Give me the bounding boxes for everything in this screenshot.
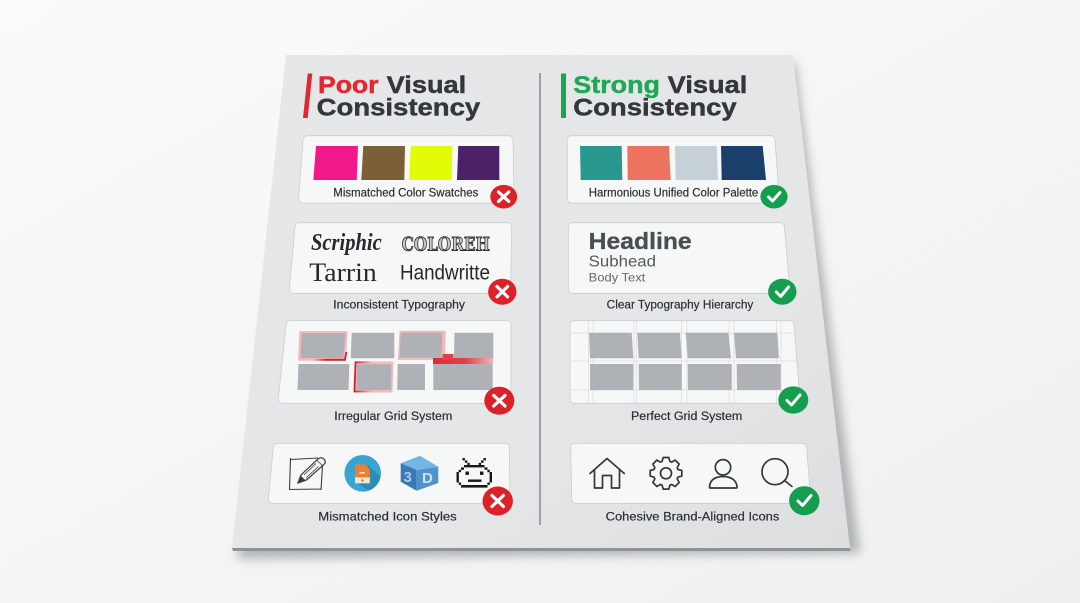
heading: poor visual consistency bbox=[303, 72, 481, 122]
icon: green check badge bbox=[768, 279, 796, 305]
heading: strong visual consistency bbox=[561, 72, 747, 122]
icon: sketched pencil bbox=[289, 458, 325, 490]
icon: pixel robot bbox=[456, 458, 492, 488]
card: clear typography hierarchy: Clear Typography Hierarchy bbox=[607, 299, 754, 311]
card: inconsistent typography: Tarrin bbox=[309, 258, 377, 287]
card: clear typography hierarchy bbox=[568, 223, 796, 311]
icon: house bbox=[590, 458, 624, 488]
card: clear typography hierarchy: Subhead bbox=[589, 254, 656, 271]
icon: red cross badge bbox=[484, 387, 514, 415]
card: cohesive brand-aligned icons bbox=[571, 443, 820, 524]
card: irregular grid system bbox=[278, 321, 514, 423]
card: harmonious color palette bbox=[567, 136, 788, 208]
icon: 3D cube: 3 bbox=[404, 469, 412, 486]
card: inconsistent typography: Inconsistent Typography bbox=[333, 299, 465, 311]
icon: red cross badge bbox=[482, 486, 513, 516]
card: mismatched color swatches bbox=[298, 136, 517, 208]
card: irregular grid system: Irregular Grid System bbox=[334, 411, 452, 423]
heading: poor visual consistency: Poor bbox=[318, 72, 378, 99]
card: perfect grid system: Perfect Grid System bbox=[631, 411, 742, 423]
heading: poor visual consistency: Visual bbox=[387, 72, 466, 99]
heading: strong visual consistency: Consistency bbox=[573, 94, 737, 122]
card: clear typography hierarchy: Headline bbox=[589, 228, 692, 254]
card: clear typography hierarchy: Body Text bbox=[589, 271, 646, 285]
card: mismatched icon styles: Mismatched Icon Styles bbox=[318, 512, 457, 524]
card: inconsistent typography: Scriphic bbox=[311, 230, 382, 256]
paper sheet bbox=[232, 55, 860, 559]
column divider bbox=[539, 73, 541, 525]
icon: user bbox=[710, 460, 737, 488]
card: inconsistent typography: COLOREH bbox=[402, 234, 490, 256]
heading: poor visual consistency: Consistency bbox=[317, 94, 481, 122]
heading: strong visual consistency: Visual bbox=[668, 72, 747, 99]
icon: green check badge bbox=[789, 486, 820, 515]
icon: flat document circle bbox=[344, 455, 381, 492]
icon: gear bbox=[650, 458, 682, 489]
card: mismatched color swatches: Mismatched Color Swatches bbox=[333, 188, 479, 200]
icon: green check badge bbox=[760, 185, 788, 208]
icon: green check badge bbox=[778, 386, 808, 414]
card: inconsistent typography bbox=[289, 223, 516, 311]
panel: strong visual consistency bbox=[561, 72, 820, 524]
card: perfect grid system bbox=[570, 321, 808, 423]
card: cohesive brand-aligned icons: Cohesive Brand-Aligned Icons bbox=[606, 512, 780, 524]
panel: poor visual consistency bbox=[268, 72, 517, 524]
card: mismatched icon styles bbox=[268, 443, 513, 524]
card: harmonious color palette: Harmonious Unified Color Palette bbox=[589, 188, 758, 200]
icon: 3D cube bbox=[401, 456, 438, 491]
heading: strong visual consistency: Strong bbox=[573, 72, 660, 99]
icon: red cross badge bbox=[490, 185, 517, 208]
icon: red cross badge bbox=[488, 279, 516, 305]
icon: 3D cube: D bbox=[422, 470, 433, 487]
icon: search bbox=[762, 459, 792, 486]
card: inconsistent typography: Handwritte bbox=[400, 262, 490, 284]
